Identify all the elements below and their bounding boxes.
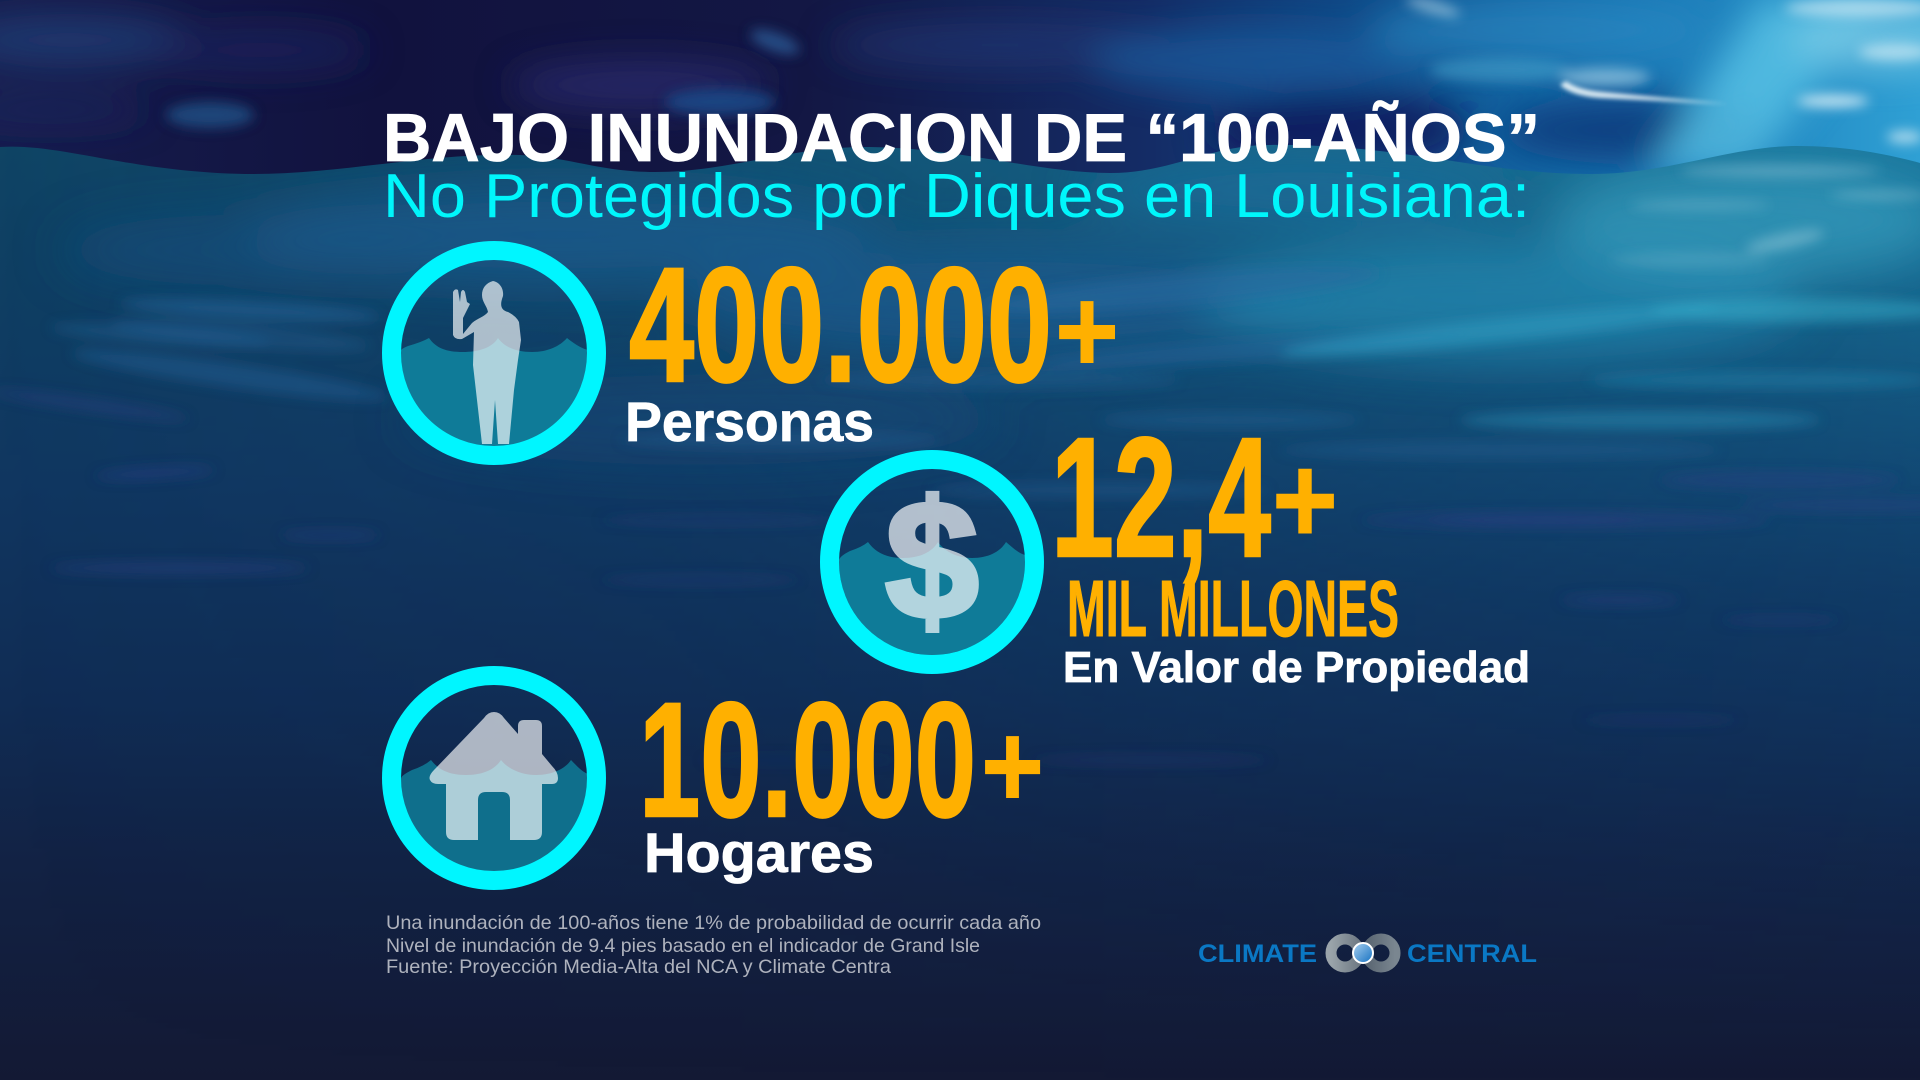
number: 12,4+: 12,4 <box>1051 403 1271 593</box>
icon: dollar in flood water <box>830 460 1034 664</box>
number: 10.000+: + <box>981 699 1044 833</box>
footnote: Nivel de inundación de 9.4 pies basado en el indicador de Grand Isle <box>386 935 980 957</box>
panel: personas <box>392 233 1119 456</box>
label: personas: Personas <box>625 390 874 453</box>
panel: property value <box>830 403 1530 692</box>
label: hogares: Hogares <box>644 821 874 884</box>
logo: climate central: CENTRAL <box>1407 940 1537 968</box>
number: 10.000+: 10.000 <box>639 668 976 851</box>
icon: house in flood water <box>392 676 596 880</box>
number: 12,4+: + <box>1272 431 1338 570</box>
title: BAJO INUNDACION DE “100-AÑOS” <box>383 100 1540 176</box>
icon: person in flood water <box>392 250 596 456</box>
logo: climate central <box>1198 939 1537 968</box>
footnote: Fuente: Proyección Media-Alta del NCA y Climate Centra <box>386 956 891 978</box>
label: mil millones: MIL MILLONES <box>1067 564 1399 653</box>
number: 400.000+: + <box>1055 264 1119 398</box>
footnote <box>386 912 1041 978</box>
label: en valor de propiedad: En Valor de Propiedad <box>1063 643 1530 692</box>
subtitle: No Protegidos por Diques en Louisiana: <box>383 162 1530 231</box>
footnote: Una inundación de 100-años tiene 1% de probabilidad de ocurrir cada año <box>386 912 1041 934</box>
icon: dollar in flood water: $ <box>885 466 979 654</box>
panel: hogares <box>392 668 1044 884</box>
logo: climate central: CLIMATE <box>1198 940 1317 968</box>
number: 400.000+: 400.000 <box>629 233 1052 416</box>
